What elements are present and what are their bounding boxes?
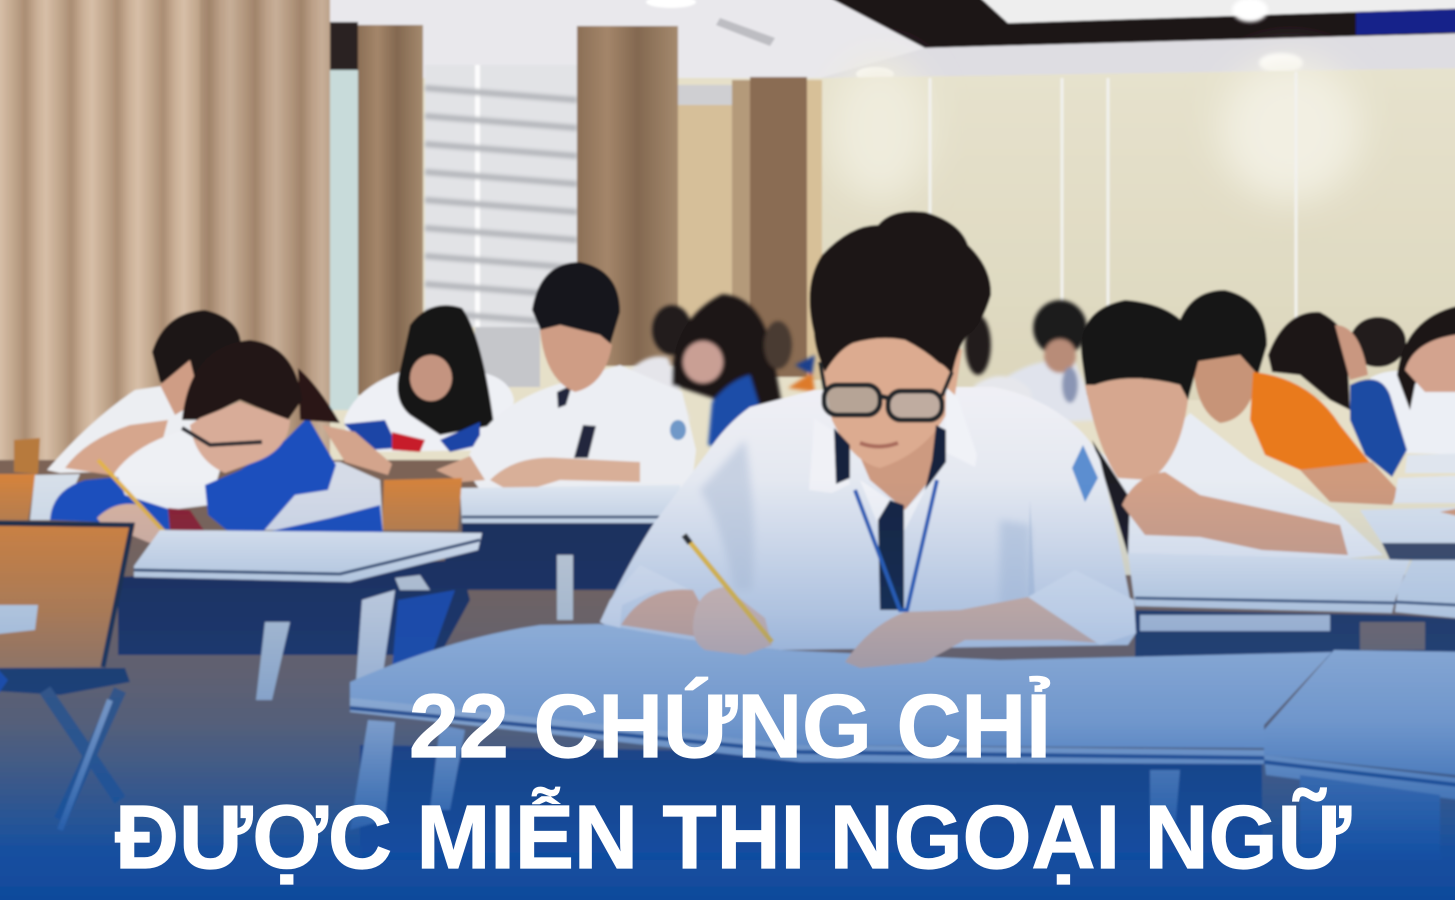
sleeve left (50, 477, 172, 530)
main student (600, 211, 1136, 650)
skirt red (168, 508, 205, 532)
hands on front desk (600, 535, 1136, 668)
right arm and hand (845, 597, 1100, 668)
pencil (98, 460, 168, 536)
title line 1: 22 CHỨNG CHỈ (409, 675, 1051, 777)
student boy centre-left (436, 262, 696, 500)
right row students (1081, 290, 1455, 660)
arm (322, 425, 392, 475)
lanyard (855, 480, 937, 610)
hair (182, 340, 302, 420)
face (190, 402, 290, 473)
right desks (1360, 453, 1455, 560)
sleeve badge (1072, 445, 1098, 502)
glasses (820, 362, 952, 420)
far students right (960, 300, 1100, 430)
collar left (809, 418, 850, 493)
student girl blue jacket (50, 340, 392, 543)
collar right (945, 387, 977, 467)
writing hand (693, 587, 772, 655)
title line 2: ĐƯỢC MIỄN THI NGOẠI NGỮ (115, 786, 1351, 888)
boy behind girl (47, 310, 241, 475)
title (115, 675, 1351, 888)
desk left centre (118, 530, 482, 700)
student orange shirt (1178, 290, 1398, 505)
curtain left (0, 0, 330, 470)
foreground desks (350, 624, 1455, 860)
main right desks (1128, 553, 1455, 660)
middle row students left and centre (0, 262, 700, 830)
student far right (1350, 303, 1455, 455)
blue gradient overlay (0, 480, 1455, 900)
hand (97, 504, 168, 543)
white shirt back (110, 430, 220, 510)
placket (878, 500, 904, 610)
collar trims (834, 428, 850, 484)
ponytail (298, 368, 340, 423)
face (818, 335, 962, 468)
back of jacket (260, 460, 383, 530)
far students centre (630, 294, 815, 448)
floor (0, 460, 1455, 900)
neck (855, 420, 945, 510)
curtain columns (330, 22, 822, 410)
left arm (621, 589, 720, 640)
far row students (630, 294, 1100, 448)
mouth (860, 443, 898, 446)
front chair (0, 523, 135, 830)
pencil (684, 535, 772, 642)
left sleeve (600, 565, 690, 628)
orange chairs back (0, 438, 462, 530)
student long hair (344, 305, 514, 452)
back wall (678, 60, 1455, 400)
shirt (600, 387, 1136, 650)
ceiling (330, 0, 1455, 81)
hair (810, 211, 991, 375)
student next to main (1081, 300, 1383, 560)
front blue (205, 417, 336, 533)
sleeve shading (700, 440, 754, 590)
right cuff (1028, 570, 1136, 645)
back desk centre (445, 485, 700, 620)
student hand on head (1268, 312, 1407, 477)
window blinds (425, 65, 577, 387)
